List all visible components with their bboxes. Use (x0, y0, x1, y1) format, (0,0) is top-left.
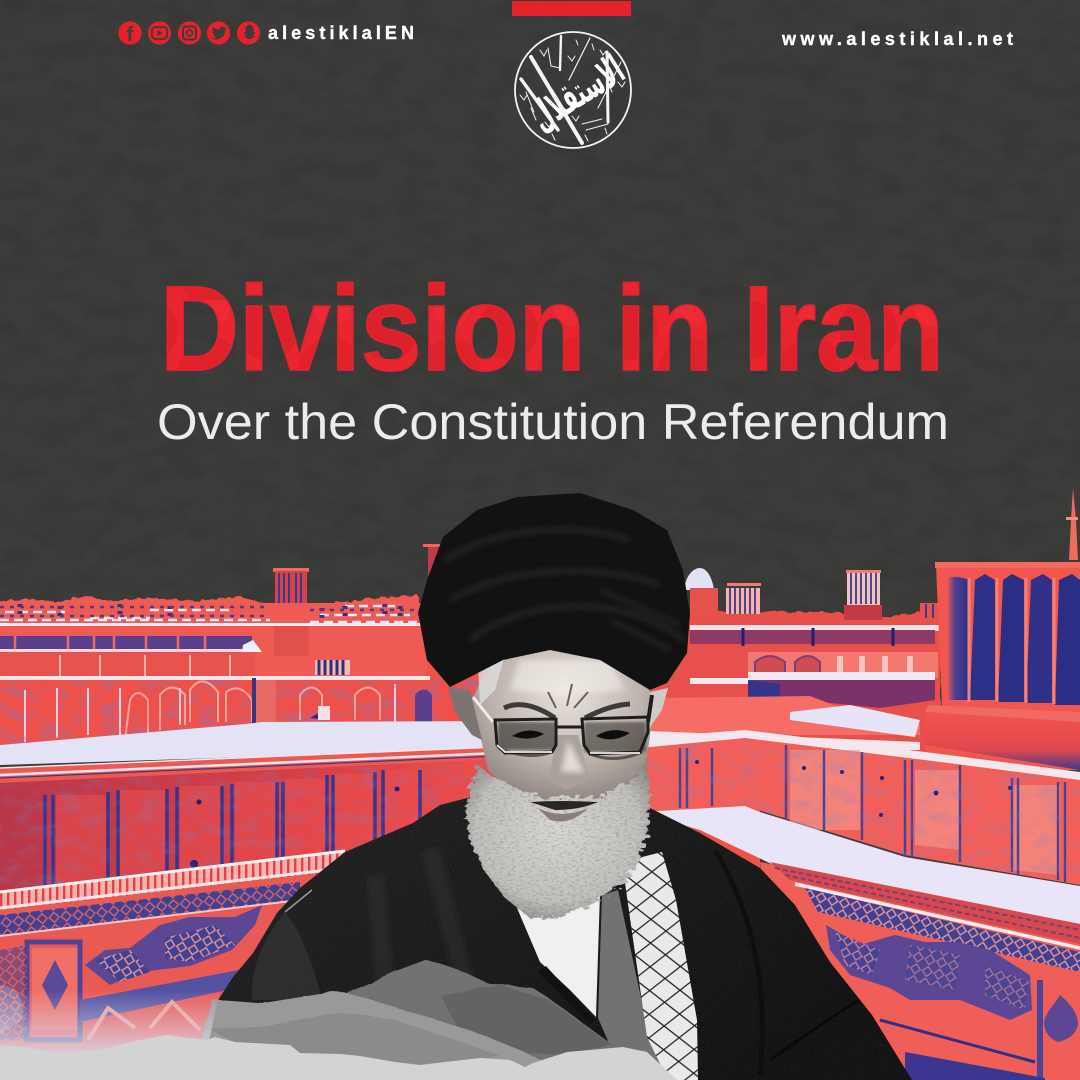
wind tower left (273, 568, 309, 656)
robe (180, 796, 912, 1080)
icon: instagram (178, 21, 201, 45)
city base behind figure (400, 640, 760, 870)
vest (598, 890, 676, 1080)
cornice and frieze right (760, 862, 1080, 1080)
balustrade left (0, 851, 345, 910)
icon: snapchat (237, 21, 260, 45)
title: Division in Iran (160, 260, 944, 396)
lower wall right with panels (640, 730, 1080, 885)
skyline silhouette: left and right (0, 595, 940, 760)
logo: calligraphic seal: الاستقلال (521, 46, 633, 140)
turban (418, 493, 690, 690)
wall right: mid terraces (640, 620, 940, 755)
icon: facebook: f (127, 24, 134, 46)
pale paper edge fade over city (0, 990, 220, 1060)
pen in pocket (538, 966, 595, 1024)
glasses (473, 695, 652, 754)
upper wall left with arches (0, 678, 520, 745)
arabesque panels left (0, 905, 262, 1040)
lower wall left with panels (0, 746, 520, 892)
dome and wind towers right (684, 568, 940, 627)
face details (478, 655, 646, 822)
cityscape illustration (0, 488, 1080, 1080)
text: website: www.alestiklal.net (781, 29, 1013, 49)
ears (448, 687, 668, 740)
checked scarf (622, 852, 698, 1080)
head: face (472, 646, 655, 810)
portrait figure (180, 493, 912, 1080)
flat white roof right (640, 806, 1080, 924)
top red accent bar (512, 1, 631, 16)
big wind tower right (925, 488, 1080, 770)
flat white roof left (0, 721, 520, 765)
text: handle: alestiklalEN (268, 23, 414, 43)
small tower behind turban (423, 544, 441, 577)
icon: twitter (207, 21, 230, 45)
subtitle: Over the Constitution Referendum (157, 394, 949, 450)
torn paper hills: mid grey layers (190, 960, 620, 1080)
social media handle row (118, 21, 414, 46)
beard (466, 758, 650, 918)
shirt (517, 893, 600, 1017)
far city rows left (0, 603, 430, 680)
torn paper foreground (0, 1035, 677, 1080)
icon: facebook (118, 21, 142, 46)
ornamental frieze left (0, 870, 345, 1060)
arabesque panel right (826, 925, 1078, 1080)
icon: youtube (148, 21, 171, 45)
